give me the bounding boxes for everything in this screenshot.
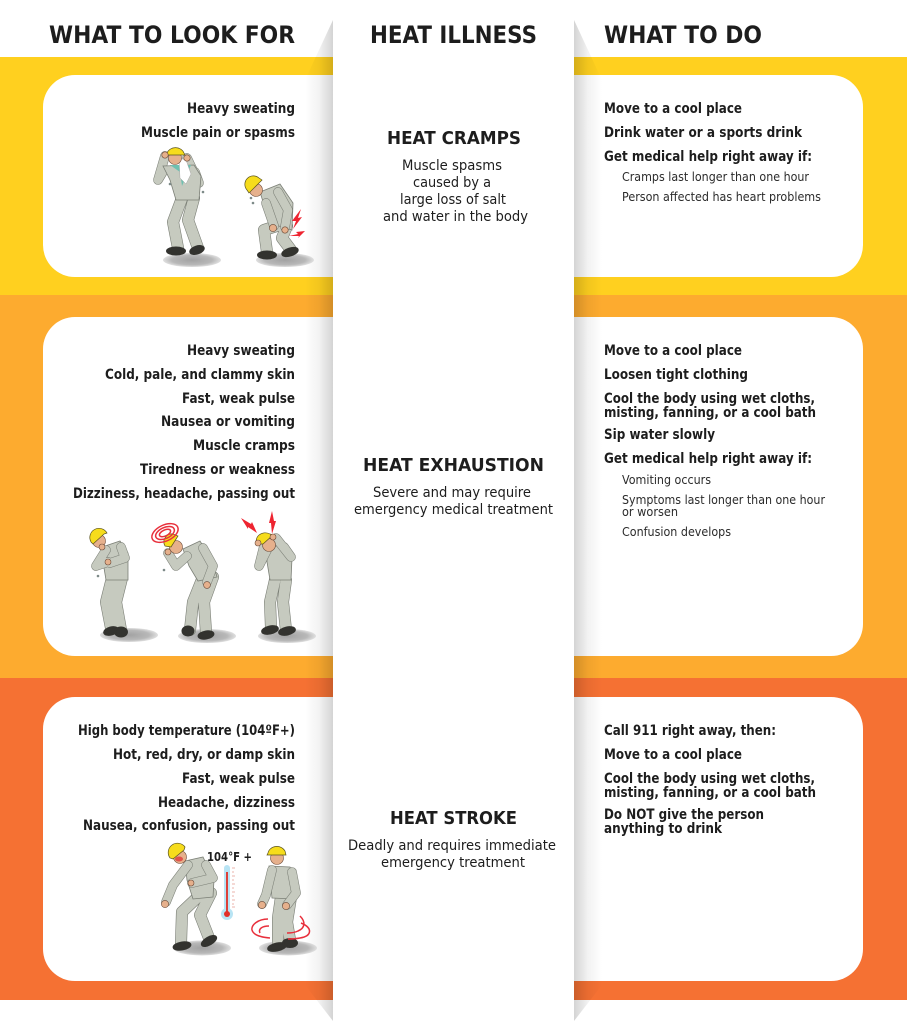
illustration: staggering worker — [252, 846, 317, 956]
actions: heat exhaustion: misting, fanning, or a cool bath — [604, 405, 816, 421]
symptoms: heat exhaustion: Fast, weak pulse — [182, 391, 295, 407]
panel: heat cramps card — [43, 75, 863, 277]
illustration: worker clutching head — [241, 511, 316, 643]
actions: heat cramps: Person affected has heart problems — [622, 189, 821, 204]
actions: heat cramps: Move to a cool place — [604, 101, 742, 117]
center text: heat exhaustion: Severe and may require — [373, 485, 531, 501]
actions: heat exhaustion: Cool the body using wet cloths, — [604, 391, 815, 407]
actions: heat exhaustion: Vomiting occurs — [622, 472, 711, 487]
symptoms: heat cramps: Heavy sweating — [187, 101, 295, 117]
center text: heat stroke — [348, 808, 556, 871]
center text: heat cramps: and water in the body — [383, 209, 528, 225]
panel: heat exhaustion band — [0, 295, 907, 678]
center text: heat stroke: emergency treatment — [381, 855, 525, 871]
symptoms: heat stroke: Headache, dizziness — [158, 795, 295, 811]
illustration: dizzy worker with red swirl — [149, 520, 236, 643]
right fold shadow — [574, 20, 602, 1021]
actions: heat exhaustion — [604, 343, 826, 539]
heading: heat illness: HEAT ILLNESS — [370, 21, 537, 49]
symptoms: heat exhaustion: Nausea or vomiting — [161, 414, 295, 430]
center text: heat exhaustion — [354, 455, 553, 518]
symptoms: heat exhaustion: Cold, pale, and clammy skin — [105, 367, 295, 383]
symptoms: heat exhaustion: Tiredness or weakness — [140, 462, 295, 478]
illustration: worker with leg cramps — [245, 176, 314, 267]
actions: heat stroke: misting, fanning, or a cool bath — [604, 785, 816, 801]
center column — [333, 0, 574, 1024]
actions: heat cramps: Cramps last longer than one hour — [622, 169, 810, 184]
actions: heat stroke: Do NOT give the person — [604, 807, 764, 823]
symptoms: heat cramps: Muscle pain or spasms — [141, 125, 295, 141]
actions: heat stroke: Move to a cool place — [604, 747, 742, 763]
symptoms: heat stroke: Fast, weak pulse — [182, 771, 295, 787]
symptoms: heat cramps — [141, 101, 295, 141]
actions: heat cramps — [604, 101, 821, 204]
actions: heat stroke — [604, 723, 816, 837]
actions: heat exhaustion: Sip water slowly — [604, 427, 715, 443]
symptoms: heat stroke: High body temperature (104ºF+) — [78, 723, 295, 739]
actions: heat cramps: Drink water or a sports drink — [604, 125, 803, 141]
actions: heat exhaustion: Move to a cool place — [604, 343, 742, 359]
actions: heat exhaustion: or worsen — [622, 504, 678, 519]
illustration: worker wiping sweat — [158, 148, 221, 267]
symptoms: heat exhaustion — [73, 343, 295, 502]
center text: heat stroke: Deadly and requires immediate — [348, 838, 556, 854]
symptoms: heat exhaustion: Muscle cramps — [193, 438, 295, 454]
symptoms: heat exhaustion: Dizziness, headache, passing out — [73, 486, 295, 502]
symptoms: heat stroke — [78, 723, 295, 834]
panel: heat stroke card — [43, 697, 863, 981]
symptoms: heat stroke: Hot, red, dry, or damp skin — [113, 747, 295, 763]
panel: heat cramps band — [0, 57, 907, 295]
actions: heat exhaustion: Confusion develops — [622, 524, 731, 539]
actions: heat stroke: anything to drink — [604, 821, 723, 837]
center text: heat exhaustion: HEAT EXHAUSTION — [363, 455, 544, 476]
center text: heat cramps — [383, 128, 528, 225]
heading: what to do: WHAT TO DO — [604, 21, 762, 49]
illustration: worker doubled over, flushed — [161, 843, 231, 956]
center text: heat stroke: HEAT STROKE — [390, 808, 517, 829]
actions: heat stroke: Cool the body using wet cloths, — [604, 771, 815, 787]
actions: heat exhaustion: Loosen tight clothing — [604, 367, 748, 383]
heading: what to look for: WHAT TO LOOK FOR — [49, 21, 295, 49]
center text: heat cramps: HEAT CRAMPS — [387, 128, 521, 149]
illustration: thermometer, 104°F + — [207, 849, 252, 920]
actions: heat cramps: Get medical help right away if: — [604, 149, 812, 165]
actions: heat exhaustion: Symptoms last longer than one hour — [622, 492, 826, 507]
illustration: thermometer, 104°F +: 104°F + — [207, 849, 252, 864]
center text: heat cramps: caused by a — [413, 175, 491, 191]
panel: heat exhaustion card — [43, 317, 863, 656]
panel: heat stroke band — [0, 678, 907, 1000]
symptoms: heat stroke: Nausea, confusion, passing out — [83, 818, 295, 834]
illustration: worker hunched, hand at chest — [90, 528, 158, 642]
center text: heat exhaustion: emergency medical treatment — [354, 502, 553, 518]
left fold shadow — [305, 20, 333, 1021]
actions: heat stroke: Call 911 right away, then: — [604, 723, 776, 739]
symptoms: heat exhaustion: Heavy sweating — [187, 343, 295, 359]
center text: heat cramps: large loss of salt — [400, 192, 506, 208]
center text: heat cramps: Muscle spasms — [402, 158, 502, 174]
actions: heat exhaustion: Get medical help right away if: — [604, 451, 812, 467]
